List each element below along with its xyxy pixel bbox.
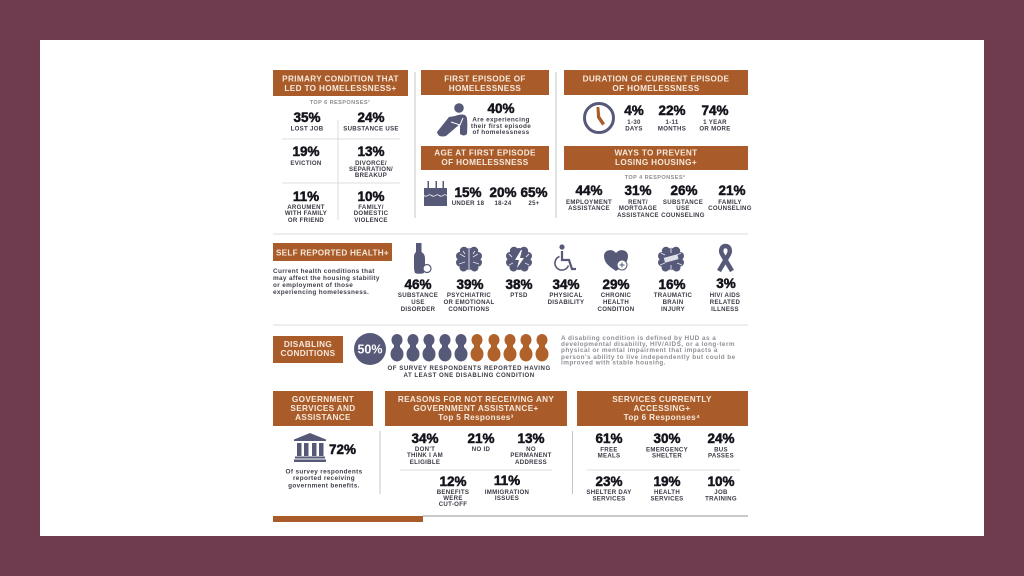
stat: shelter day services: SHELTER DAY bbox=[586, 489, 632, 496]
stat: 1-30 days bbox=[624, 103, 644, 132]
stat: physical disability: DISABILITY bbox=[548, 299, 584, 306]
stat: substance counseling: 26% bbox=[670, 183, 698, 198]
stat: job training: 10% bbox=[707, 474, 735, 489]
stat: not eligible: ELIGIBLE bbox=[410, 459, 440, 466]
stat: 18-24 bbox=[489, 185, 517, 207]
text: disabling definition: person's ability to live independently but could be bbox=[561, 354, 736, 361]
heading: first episode: HOMELESSNESS bbox=[449, 84, 521, 93]
stat: psychiatric: CONDITIONS bbox=[448, 306, 490, 313]
caption: disabling survey: AT LEAST ONE DISABLING CONDITION bbox=[404, 372, 534, 379]
stat: substance counseling: SUBSTANCE bbox=[663, 199, 703, 206]
stat: 18-24: 18-24 bbox=[494, 200, 512, 207]
stat: chronic condition: HEALTH bbox=[603, 299, 629, 306]
stat: eviction bbox=[290, 144, 322, 167]
stat: bus passes bbox=[707, 431, 735, 460]
heading: first episode: FIRST EPISODE OF bbox=[444, 74, 526, 84]
stat: hiv aids: HIV/ AIDS bbox=[710, 292, 740, 299]
caption: disabling survey bbox=[388, 365, 550, 379]
stat: no permanent address: NO bbox=[526, 446, 536, 453]
panel: services accessing bbox=[577, 391, 748, 502]
text: health description: experiencing homelessness. bbox=[273, 289, 369, 296]
stat: shelter day services bbox=[586, 474, 632, 502]
stat: chronic condition: CHRONIC bbox=[601, 292, 632, 299]
stat: shelter day services: SERVICES bbox=[592, 496, 626, 502]
heading: ways to prevent: LOSING HOUSING+ bbox=[615, 158, 697, 167]
stat: 72 percent: 72% bbox=[329, 442, 356, 457]
stat: not eligible: THINK I AM bbox=[407, 452, 443, 459]
stat: family violence: DOMESTIC bbox=[354, 210, 389, 217]
stat: immigration issues bbox=[485, 473, 529, 502]
stat: family violence: VIOLENCE bbox=[354, 217, 388, 224]
icon: heart with plus bbox=[604, 250, 628, 271]
heading: duration: DURATION OF CURRENT EPISODE bbox=[583, 74, 730, 84]
caption: disabling survey: OF SURVEY RESPONDENTS REPORTED HAVING bbox=[388, 365, 550, 372]
stat: argument bbox=[285, 189, 327, 224]
stat: substance use disorder: USE bbox=[411, 299, 425, 306]
icon: bottle bbox=[414, 243, 431, 274]
stat: family violence: 10% bbox=[357, 189, 385, 204]
stat: family violence bbox=[354, 189, 389, 224]
subheading: top 6 responses: TOP 6 RESPONSES¹ bbox=[310, 99, 370, 106]
heading: ways to prevent: WAYS TO PREVENT bbox=[614, 148, 698, 158]
stat: lost job: LOST JOB bbox=[291, 126, 324, 132]
stat: under 18: UNDER 18 bbox=[452, 200, 485, 207]
stat: bus passes: BUS bbox=[714, 446, 728, 454]
stat: traumatic brain injury: TRAUMATIC bbox=[654, 292, 693, 299]
stat: benefits cut off bbox=[437, 474, 469, 508]
stat: divorce: DIVORCE/ bbox=[355, 160, 387, 167]
stat: no permanent address: 13% bbox=[517, 431, 545, 446]
stat: health services bbox=[650, 474, 684, 502]
heading: self reported health: SELF REPORTED HEALTH+ bbox=[276, 248, 389, 258]
stat: shelter day services: 23% bbox=[595, 474, 623, 489]
text: disabling definition: A disabling condition is defined by HUD as a bbox=[561, 335, 716, 342]
stat: emergency shelter bbox=[646, 431, 688, 460]
stat: bus passes: 24% bbox=[707, 431, 735, 446]
heading: disabling conditions: CONDITIONS bbox=[281, 349, 336, 358]
stat: ptsd bbox=[505, 277, 533, 299]
stat: not eligible bbox=[407, 431, 443, 466]
heading: primary condition: PRIMARY CONDITION THAT bbox=[282, 74, 399, 84]
text: disabling definition bbox=[561, 335, 736, 366]
stat: divorce: 13% bbox=[357, 144, 385, 159]
heading: reasons: Top 5 Responses³ bbox=[438, 413, 514, 422]
stat: traumatic brain injury: BRAIN bbox=[663, 299, 683, 306]
stat: family counseling: COUNSELING bbox=[708, 205, 752, 212]
subheading: top 4 responses: TOP 4 RESPONSES² bbox=[625, 174, 685, 181]
icon: clock bbox=[584, 104, 614, 132]
text: disabling definition: developmental disability, HIV/AIDS, or a long-term bbox=[561, 341, 735, 348]
heading: government services: ASSISTANCE bbox=[295, 413, 351, 422]
heading: disabling conditions bbox=[273, 336, 343, 363]
stat: chronic condition: CONDITION bbox=[598, 306, 634, 313]
stat: ptsd: 38% bbox=[505, 277, 533, 292]
text: health description: may affect the housing stability bbox=[273, 275, 380, 282]
stat: 25+ bbox=[520, 185, 548, 207]
stat: 1-30 days: 1-30 bbox=[627, 119, 641, 126]
stat: 40 percent bbox=[471, 101, 531, 136]
stat: 40 percent: Are experiencing bbox=[472, 116, 530, 124]
stat: benefits cut off: 12% bbox=[439, 474, 467, 489]
icon: seated person bbox=[437, 103, 467, 136]
heading: primary condition bbox=[273, 70, 408, 96]
stat: free meals: FREE bbox=[600, 446, 618, 454]
stat: 1-30 days: 4% bbox=[624, 103, 644, 118]
stat: family counseling: FAMILY bbox=[718, 199, 742, 206]
heading: services accessing: ACCESSING+ bbox=[634, 404, 690, 413]
heading: services accessing: SERVICES CURRENTLY bbox=[612, 395, 712, 404]
stat: employment assistance bbox=[566, 183, 612, 212]
stat: 25+: 25+ bbox=[528, 200, 540, 207]
stat: bus passes: PASSES bbox=[708, 452, 734, 460]
stat: under 18: 15% bbox=[454, 185, 482, 200]
icon: birthday cake bbox=[424, 181, 447, 206]
stat: under 18 bbox=[452, 185, 485, 207]
stat: argument: 11% bbox=[293, 189, 319, 204]
stat: employment assistance: EMPLOYMENT bbox=[566, 199, 612, 206]
stat: substance counseling bbox=[661, 183, 705, 219]
stat: chronic condition bbox=[598, 277, 634, 313]
text: government benefits: reported receiving bbox=[293, 475, 355, 482]
stat: emergency shelter: SHELTER bbox=[652, 452, 682, 460]
text: government benefits: government benefits. bbox=[288, 482, 360, 490]
stat: psychiatric: OR EMOTIONAL bbox=[444, 299, 494, 306]
stat: lost job: 35% bbox=[293, 110, 321, 125]
stat: benefits cut off: CUT-OFF bbox=[439, 501, 467, 508]
stat: hiv aids: ILLNESS bbox=[711, 306, 739, 313]
stat: substance use disorder bbox=[398, 277, 438, 313]
stat: 1 year or more: OR MORE bbox=[699, 126, 731, 132]
stat: lost job bbox=[291, 110, 324, 132]
stat: free meals: MEALS bbox=[598, 452, 620, 460]
stat: rent assistance: ASSISTANCE bbox=[617, 212, 659, 219]
stat: benefits cut off: WERE bbox=[443, 495, 463, 502]
stat: employment assistance: ASSISTANCE bbox=[568, 205, 610, 212]
text: government benefits bbox=[286, 468, 363, 490]
stat: free meals bbox=[595, 431, 623, 460]
stat: immigration issues: ISSUES bbox=[495, 495, 519, 502]
stat: substance use disorder: 46% bbox=[404, 277, 432, 292]
stat: psychiatric bbox=[444, 277, 494, 313]
stat: divorce bbox=[349, 144, 393, 179]
stat: job training: JOB bbox=[714, 489, 728, 496]
stat: chronic condition: 29% bbox=[602, 277, 630, 292]
stat: not eligible: DON'T bbox=[415, 446, 435, 453]
footer bar bbox=[273, 516, 423, 522]
stat: hiv aids: 3% bbox=[716, 276, 736, 291]
stat: job training: TRAINING bbox=[705, 496, 737, 502]
panel: reasons bbox=[385, 391, 567, 508]
panel: self reported health bbox=[273, 243, 741, 313]
stat: 40 percent: their first episode bbox=[471, 123, 531, 130]
stat: family counseling: 21% bbox=[718, 183, 746, 198]
stat: psychiatric: 39% bbox=[456, 277, 484, 292]
stat: no id bbox=[467, 431, 495, 453]
stat: argument: ARGUMENT bbox=[287, 204, 325, 211]
stat: substance counseling: COUNSELING bbox=[661, 212, 705, 219]
stat: physical disability: PHYSICAL bbox=[549, 292, 583, 299]
stat: employment assistance: 44% bbox=[575, 183, 603, 198]
stat: health services: 19% bbox=[653, 474, 681, 489]
heading: primary condition: LED TO HOMELESSNESS+ bbox=[284, 84, 397, 93]
panel: primary condition bbox=[273, 70, 408, 224]
stat: no permanent address: ADDRESS bbox=[515, 459, 547, 466]
icon: brain with lightning bbox=[506, 247, 532, 272]
heading: services accessing: Top 6 Responses⁴ bbox=[624, 413, 700, 422]
heading: duration bbox=[564, 70, 748, 95]
people pictogram bbox=[390, 334, 548, 362]
text: disabling definition: improved with stable housing. bbox=[561, 360, 666, 366]
stat: not eligible: 34% bbox=[411, 431, 439, 446]
stat: divorce: BREAKUP bbox=[355, 172, 387, 179]
stat: family violence: FAMILY/ bbox=[358, 204, 384, 211]
stat: substance use: 24% bbox=[357, 110, 385, 125]
text: health description: Current health conditions that bbox=[273, 268, 375, 275]
stat: 1 year or more: 1 YEAR bbox=[703, 119, 727, 126]
stat: immigration issues: 11% bbox=[494, 473, 520, 488]
heading: reasons: REASONS FOR NOT RECEIVING ANY bbox=[398, 395, 554, 404]
heading: self reported health bbox=[273, 243, 392, 261]
heading: duration: OF HOMELESSNESS bbox=[612, 84, 700, 93]
heading: ways to prevent bbox=[564, 146, 748, 170]
icon: brain bbox=[456, 247, 482, 272]
icon: injured brain bbox=[658, 247, 684, 272]
text: health description bbox=[273, 268, 380, 296]
stat: rent assistance: RENT/ bbox=[628, 199, 648, 206]
stat: benefits cut off: BENEFITS bbox=[437, 489, 469, 496]
stat: eviction: 19% bbox=[292, 144, 320, 159]
stat: 40 percent: 40% bbox=[487, 101, 515, 116]
stat: psychiatric: PSYCHIATRIC bbox=[447, 292, 491, 299]
stat: immigration issues: IMMIGRATION bbox=[485, 489, 529, 496]
stat: rent assistance: 31% bbox=[624, 183, 652, 198]
stat: 18-24: 20% bbox=[489, 185, 517, 200]
stat: substance use: SUBSTANCE USE bbox=[343, 126, 399, 132]
stat: argument: OR FRIEND bbox=[288, 217, 324, 224]
stat: emergency shelter: 30% bbox=[653, 431, 681, 446]
stat: free meals: 61% bbox=[595, 431, 623, 446]
stat: substance use disorder: SUBSTANCE bbox=[398, 292, 438, 299]
stat: job training bbox=[705, 474, 737, 502]
heading: age at first episode bbox=[421, 146, 549, 170]
heading: government services: SERVICES AND bbox=[290, 404, 356, 413]
heading: first episode bbox=[421, 70, 549, 95]
stat: 1-11 months: MONTHS bbox=[658, 126, 686, 132]
stat: 1-11 months: 22% bbox=[658, 103, 686, 118]
stat: hiv aids bbox=[710, 276, 741, 313]
stat: no permanent address: PERMANENT bbox=[510, 452, 552, 459]
stat: traumatic brain injury: 16% bbox=[658, 277, 686, 292]
heading: government services: GOVERNMENT bbox=[292, 395, 354, 404]
stat: 1-30 days: DAYS bbox=[625, 126, 643, 132]
stat: health services: HEALTH bbox=[654, 489, 680, 496]
panel: age at first episode bbox=[421, 146, 549, 207]
stat: traumatic brain injury: INJURY bbox=[661, 306, 685, 313]
stat: family counseling bbox=[708, 183, 752, 212]
stat: health services: SERVICES bbox=[650, 496, 684, 502]
text: government benefits: Of survey respondents bbox=[286, 468, 363, 476]
stat: substance use bbox=[343, 110, 399, 132]
icon: wheelchair bbox=[555, 244, 576, 270]
icon: awareness ribbon bbox=[719, 246, 732, 271]
heading: age at first episode: AGE AT FIRST EPISODE bbox=[434, 148, 536, 158]
stat: divorce: SEPARATION/ bbox=[349, 166, 393, 173]
stat: physical disability: 34% bbox=[552, 277, 580, 292]
heading: reasons bbox=[385, 391, 567, 426]
stat: emergency shelter: EMERGENCY bbox=[646, 446, 688, 454]
stat: 25+: 65% bbox=[520, 185, 548, 200]
stat: substance use disorder: DISORDER bbox=[401, 306, 436, 313]
heading: services accessing bbox=[577, 391, 748, 426]
panel: duration bbox=[564, 70, 748, 132]
stat: traumatic brain injury bbox=[654, 277, 693, 313]
panel: government services bbox=[273, 391, 373, 490]
stat: 1-11 months: 1-11 bbox=[665, 119, 679, 126]
text: disabling definition: physical or mental impairment that impacts a bbox=[561, 347, 718, 354]
stat: 1 year or more bbox=[699, 103, 731, 132]
heading: disabling conditions: DISABLING bbox=[284, 340, 332, 349]
text: health description: or employment of those bbox=[273, 282, 353, 289]
heading: government services bbox=[273, 391, 373, 426]
stat: no permanent address bbox=[510, 431, 552, 466]
stat: ptsd: PTSD bbox=[510, 292, 528, 299]
stat: rent assistance bbox=[617, 183, 659, 219]
icon: 50 percent circle: 50% bbox=[357, 342, 383, 356]
panel: first episode bbox=[421, 70, 549, 136]
heading: reasons: GOVERNMENT ASSISTANCE+ bbox=[413, 404, 539, 413]
icon: 50 percent circle bbox=[354, 333, 386, 365]
heading: age at first episode: OF HOMELESSNESS bbox=[441, 158, 529, 167]
panel: ways to prevent bbox=[564, 146, 752, 219]
stat: no id: 21% bbox=[467, 431, 495, 446]
stat: no id: NO ID bbox=[472, 446, 491, 453]
stat: hiv aids: RELATED bbox=[710, 299, 741, 306]
panel: disabling conditions bbox=[273, 333, 736, 379]
icon: government building bbox=[294, 433, 326, 462]
stat: substance counseling: USE bbox=[676, 205, 690, 212]
stat: 1-11 months bbox=[658, 103, 686, 132]
stat: rent assistance: MORTGAGE bbox=[619, 205, 657, 212]
stat: physical disability bbox=[548, 277, 584, 306]
stat: argument: WITH FAMILY bbox=[285, 210, 327, 217]
stat: eviction: EVICTION bbox=[290, 160, 322, 167]
stat: 1 year or more: 74% bbox=[701, 103, 729, 118]
stat: 40 percent: of homelessness bbox=[472, 129, 530, 136]
